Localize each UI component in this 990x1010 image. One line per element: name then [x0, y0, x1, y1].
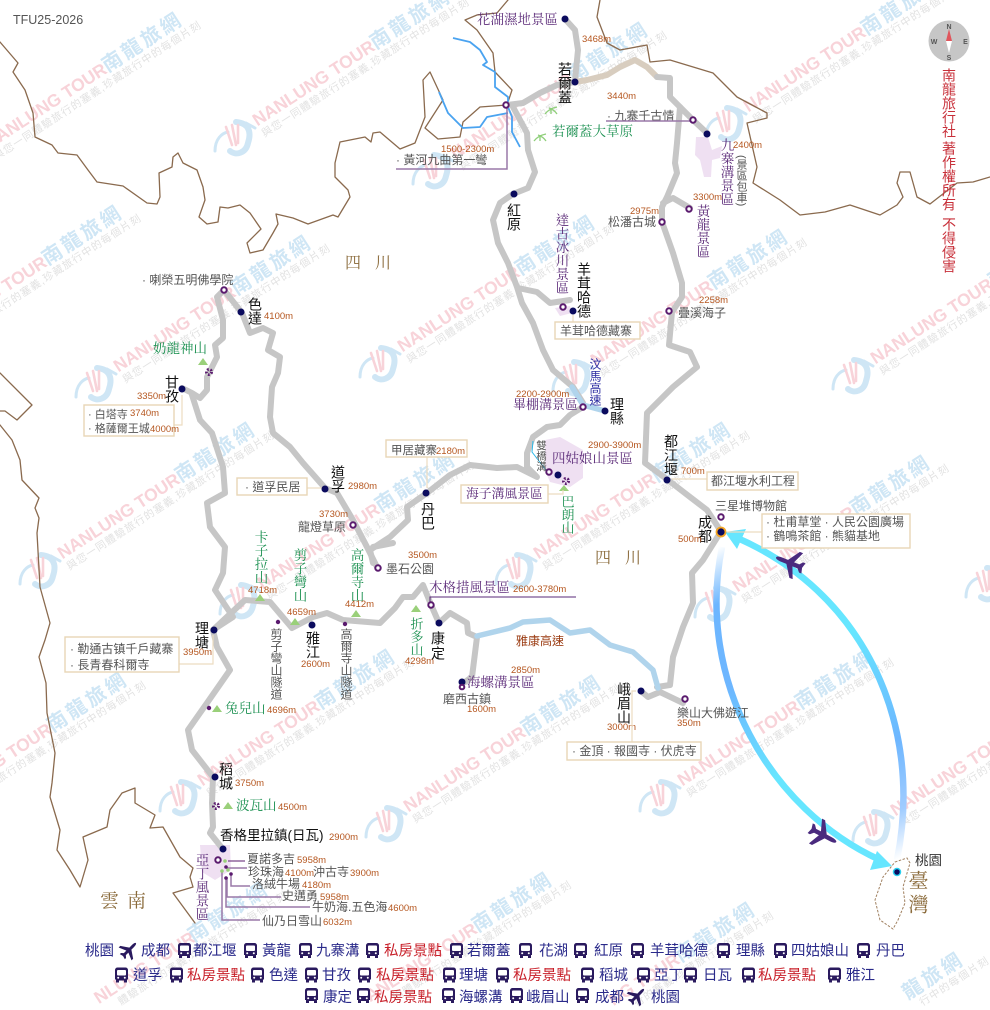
Nailong mountain: 奶龍神山: [153, 340, 207, 356]
watermark layer: 南龍旅網: [184, 877, 274, 947]
Gaoersi mountain: [345, 547, 374, 617]
watermark layer: 南龍旅網: [311, 644, 401, 714]
Balang mountain: 巴朗山: [560, 495, 574, 534]
stop: Seda: 4100m: [264, 311, 293, 322]
itinerary line 2: 私房景點: [376, 967, 434, 984]
stop: Diexi lake: 疊溪海子: [678, 305, 726, 320]
Zheduo mountain: 折多山: [408, 616, 424, 656]
stop: Jiuzhaigou: 2400m: [733, 140, 762, 151]
watermark layer: 龍旅網: [898, 947, 969, 1004]
stop: Ganzi: · 格薩爾王城: [88, 421, 150, 435]
watermark layer: NANLUNG TOUR: [394, 262, 524, 356]
stop: Mugecuo: 木格措風景區: [429, 579, 510, 595]
Yading scenic area: 4100m: [285, 868, 314, 879]
copyright notice: [941, 68, 957, 273]
stop: Hongyuan: 紅原: [506, 203, 522, 231]
stop: Longdeng grassland: 3730m: [319, 509, 348, 520]
stop: Hongyuan: [506, 190, 522, 231]
stop: Siguniang mountain: 四姑娘山景區: [552, 451, 633, 466]
stop: Siguniang mountain: [532, 439, 641, 478]
watermark layer: 南龍旅網: [647, 417, 737, 487]
stop: Litang: 3950m: [183, 647, 212, 658]
stop: Ganzi: 甘孜: [164, 375, 180, 403]
label: Wenma expressway: 汶馬高速: [588, 357, 602, 406]
compass: [928, 20, 970, 62]
stop: Ganzi: 4000m: [150, 424, 179, 435]
stop: Litang: · 勒通古镇千戶藏寨: [70, 641, 173, 656]
watermark layer: 行中的每個片刻: [917, 954, 990, 1009]
stop: Huahu wetland: 3468m: [582, 34, 611, 45]
stop: Shangri-La town: [220, 828, 358, 852]
itinerary line 1: 私房景點: [384, 942, 442, 960]
Yading scenic area: 牛奶海.五色海: [312, 899, 387, 914]
watermark layer: 同體驗旅行的塞義,珍藏旅行中的每個片刻: [390, 878, 574, 1004]
stop: Danba: 甲居藏寨: [391, 443, 437, 457]
watermark layer: ANLUNG TOUR: [362, 919, 481, 1006]
scenic area blobs: [200, 137, 722, 880]
watermark layer: NANLUNG TOUR: [729, 502, 859, 596]
stop: Bipenggou: 畢棚溝景區: [513, 397, 578, 412]
stop: Dujiangyan: 700m: [681, 466, 705, 477]
itinerary line 3: 桃園: [651, 989, 680, 1006]
watermark layer: 與您一同體驗旅行的塞義,珍藏旅行中的每個片刻: [410, 681, 623, 826]
Gaoersi mountain: 高爾寺山: [348, 547, 364, 602]
Jianziwan mountain: 剪子彎山: [292, 548, 307, 602]
stop: Dagu glacier: 達古冰川景區: [554, 212, 569, 294]
watermark layer: 南龍旅網: [371, 447, 461, 517]
stop: Huahu wetland: 花湖濕地景區: [477, 11, 558, 27]
stop: Huanglong: [686, 192, 722, 258]
watermark layer: 與您一同體驗旅行的塞義,珍藏旅行中的每個片刻: [404, 221, 617, 366]
stop: Emei mountain: 峨眉山: [616, 682, 632, 724]
stop: Songpan: [608, 206, 665, 229]
stop: Jiuzhaigou: [704, 130, 762, 206]
label: Yakang expressway: 雅康高速: [516, 633, 564, 648]
compass: S: [947, 55, 952, 62]
watermark layer: 南龍旅網: [564, 17, 654, 87]
stop: Emei mountain: [567, 682, 701, 760]
stop: Ganzi: 3740m: [130, 408, 159, 419]
itinerary line 3: 私房景點: [374, 989, 432, 1006]
Yading scenic area: 3900m: [350, 868, 379, 879]
itinerary line 2: 亞丁: [654, 968, 683, 984]
stop: Shangri-La town: 2900m: [329, 832, 358, 843]
itinerary line 1: [85, 937, 905, 963]
stop: Chengdu: · 杜甫草堂 · 人民公園廣場: [766, 514, 904, 529]
Yading scenic area: 沖古寺: [313, 864, 349, 879]
Haizigou box: [461, 485, 563, 503]
Yading scenic area: 4180m: [302, 880, 331, 891]
itinerary line 2: 私房景點: [758, 967, 816, 984]
stop: Huahu wetland: [477, 11, 611, 45]
stop: Yangrong Hade: [555, 262, 640, 339]
stop: Moshi park: [375, 550, 437, 576]
Yading scenic area: 6032m: [323, 917, 352, 928]
stop: Litang: [65, 621, 218, 672]
stop: Songpan: 松潘古城: [608, 214, 656, 229]
stop: Yajiang: 2600m: [301, 659, 330, 670]
stop: Seda: · 喇榮五明佛學院: [142, 272, 233, 287]
stop: Mugecuo: [428, 579, 576, 608]
Yading scenic area: 史邁勇: [282, 889, 318, 903]
watermark layer: NANLUNG TOUR: [249, 36, 379, 130]
stop: Dujiangyan: 都江堰: [663, 434, 679, 476]
stop: Seda: 色達: [247, 296, 263, 326]
stop: Daocheng: 稻城: [218, 762, 234, 791]
itinerary line 3: 海螺溝: [459, 989, 502, 1006]
stop: Dujiangyan: 都江堰水利工程: [711, 474, 795, 488]
watermark layer: 與您一同體驗旅行的塞義,珍藏旅行中的每個片刻: [739, 461, 952, 606]
stop: Lixian: [602, 397, 625, 425]
stop: Yajiang: 雅江: [305, 631, 321, 659]
stop: Diexi lake: 2258m: [699, 295, 728, 306]
stop: Songpan: 2975m: [630, 206, 659, 217]
watermark layer: NANLUNG TOUR: [54, 469, 184, 563]
itinerary line 1: 都江堰: [193, 942, 236, 960]
compass: E: [963, 39, 968, 46]
stop: Leshan buddha: 350m: [677, 718, 701, 729]
stop: Leshan buddha: [677, 696, 749, 729]
Balang mountain: [559, 478, 574, 534]
watermark layer: NANLUNG TOUR: [400, 722, 530, 816]
Bowa mountain: 波瓦山: [236, 798, 276, 813]
expressways: [477, 387, 658, 688]
itinerary line 1: 成都: [141, 942, 170, 960]
stop: Hailuogou: 磨西古鎮: [443, 691, 491, 706]
watermark layer: 南龍旅網: [846, 450, 936, 520]
watermark layer: NANLUNG TOUR: [587, 276, 717, 370]
copyright notice: 不得侵害: [941, 217, 957, 273]
stop: Shangri-La town: 香格里拉鎮(日瓦): [220, 828, 324, 843]
itinerary line 1: 桃園: [85, 942, 114, 960]
Jianziwan tunnel: 剪子彎山隧道: [269, 627, 283, 701]
watermark layer: 與您一同體驗旅行的塞義,珍藏旅行中的每個片刻: [259, 0, 472, 140]
watermark layer: 與您一同體驗旅行的塞義,珍藏旅行中的每個片刻: [684, 655, 897, 800]
stop: Danba: [386, 440, 467, 530]
stop: Chengdu: · 鶴鳴茶館 · 熊貓基地: [766, 528, 880, 543]
Yading scenic area: 亞丁風景區: [194, 853, 209, 921]
stop: Yellow River first bend: · 黃河九曲第一彎: [396, 152, 487, 167]
stop: Moshi park: 墨石公園: [386, 562, 434, 576]
stop: Bipenggou: 2200-2900m: [516, 389, 569, 400]
watermark layer: 與您一同體驗旅行的塞義,珍藏旅行中的每個片刻: [64, 428, 277, 573]
stop: Ruoergai: 若爾蓋: [557, 61, 573, 104]
stop: Hailuogou: 海螺溝景區: [467, 674, 534, 690]
icon: airplane return: [804, 816, 843, 854]
Yading scenic area: 4600m: [388, 903, 417, 914]
stop: Ganzi: · 白塔寺: [88, 407, 128, 421]
itinerary route text: [85, 937, 905, 1009]
stop: Taoyuan, Taiwan: 臺灣: [905, 870, 928, 918]
watermark layer: 與您一同體驗旅行的塞義,珍藏旅行中的每個片刻: [457, 28, 670, 173]
Bowa mountain: 4500m: [278, 802, 307, 813]
Yading scenic area: 5958m: [320, 892, 349, 903]
watermark layer: 南龍旅網: [171, 417, 261, 487]
Zheduo mountain: [405, 605, 434, 667]
itinerary line 2: 私房景點: [187, 967, 245, 984]
stop: Moshi park: 3500m: [408, 550, 437, 561]
region labels: 四川: [345, 254, 405, 272]
watermark layer: NANLUNG TOUR: [674, 696, 804, 790]
stop: Mugecuo: 2600-3780m: [513, 584, 566, 595]
watermark layer: NLUNG TOUR: [90, 927, 199, 1008]
Ruoergai grassland label: 若爾蓋大草原: [552, 123, 633, 139]
watermark layer: 與您一同體驗旅行的塞義,珍藏旅行中的每個片刻: [597, 235, 810, 380]
stop: Daofu: 道孚: [330, 465, 346, 493]
road network: [182, 19, 720, 848]
watermark layer: 行的塞義,珍藏旅行中的每個片刻: [631, 909, 776, 1009]
Nailong mountain: [153, 340, 212, 374]
copyright notice: 南龍旅行社: [941, 68, 957, 138]
region labels: 雲南: [100, 890, 154, 912]
itinerary line 1: 若爾蓋: [467, 942, 510, 960]
stop: Ganzi: [84, 375, 186, 436]
Bowa mountain: [214, 798, 307, 813]
watermark layer: NANLUNG TOUR: [447, 69, 577, 163]
itinerary line 2: 稻城: [599, 967, 628, 984]
watermark layer: NG TOUR: [605, 949, 683, 1010]
stop: Bipenggou: [513, 389, 586, 412]
itinerary line 2: [115, 967, 875, 984]
itinerary line 1: 九寨溝: [316, 942, 360, 960]
stop: Yajiang: [301, 622, 330, 670]
stop: Siguniang mountain: 雙橋溝: [535, 439, 547, 472]
itinerary line 2: 理塘: [459, 967, 488, 984]
stop: Longdeng grassland: 龍燈草原: [298, 519, 346, 534]
Yading scenic area: [194, 851, 417, 928]
watermark layer: 與您一同體驗旅行的塞義,珍藏旅行中的每個片刻: [540, 428, 753, 573]
stop: Hailuogou: 1600m: [467, 704, 496, 715]
stop: Litang: · 長青春科爾寺: [70, 658, 149, 672]
stop: Seda: [142, 272, 293, 326]
Gaoersi tunnel: 高爾寺山隧道: [339, 627, 353, 701]
Yading scenic area: 5958m: [297, 855, 326, 866]
stop: Daofu: 2980m: [348, 481, 377, 492]
stop: Yangrong Hade: 羊茸哈德藏寨: [560, 323, 632, 338]
itinerary line 2: 色達: [269, 967, 298, 984]
itinerary line 1: 黃龍: [262, 942, 291, 960]
stop: Yellow River first bend: 1500-2300m: [441, 144, 494, 155]
itinerary line 2: 雅江: [846, 967, 875, 984]
watermark layer: 體驗旅行的塞義,珍藏旅行中的每個片刻: [116, 888, 290, 1008]
stop: Chengdu: 500m: [678, 534, 702, 545]
stop: Daofu: [237, 465, 377, 495]
code label: TFU25-2026: [13, 13, 83, 27]
itinerary line 2: 私房景點: [513, 967, 571, 984]
watermark layer: 南龍旅網: [704, 224, 794, 294]
flight arc: Chengdu to Taoyuan: [716, 547, 892, 870]
itinerary line 3: 康定: [323, 989, 352, 1006]
stop: Emei mountain: 3000m: [607, 722, 636, 733]
stop: Siguniang mountain: 2900-3900m: [588, 440, 641, 451]
watermark layer: 南龍旅網: [671, 897, 761, 967]
stop: Danba: 2180m: [436, 446, 465, 457]
stop: Hailuogou: 2850m: [511, 665, 540, 676]
watermark layer: 與您一同體驗旅行的塞義,珍藏旅行中的每個片刻: [120, 241, 333, 386]
stop: Emei mountain: · 金頂 · 報國寺 · 伏虎寺: [572, 743, 697, 758]
watermark layer: NANLUNG TOUR: [254, 499, 384, 593]
rivers: Yellow River headwaters: [439, 38, 520, 147]
stop: Chengdu: 成都: [697, 515, 713, 543]
watermark layer: 南龍旅網: [468, 867, 558, 937]
stop: Jiuzhaigou: 九寨溝景區: [718, 138, 734, 206]
stop: Longdeng grassland: [298, 509, 356, 534]
itinerary line 1: 羊茸哈德: [650, 942, 708, 960]
Haizigou box: 海子溝風景區: [466, 486, 543, 501]
stop: Litang: 理塘: [194, 621, 210, 649]
stop: Ruoergai: [557, 61, 636, 104]
stop: Daocheng: [212, 762, 264, 791]
Kazila mountain: 4718m: [248, 585, 277, 596]
Yading scenic area: 洛絨牛場: [252, 876, 300, 891]
compass: N: [946, 24, 952, 31]
stop: Huanglong: 3300m: [693, 192, 722, 203]
watermark layer: 南龍旅網: [227, 230, 317, 300]
stop: Yellow River first bend: [396, 102, 509, 169]
stop: Taoyuan, Taiwan: 桃園: [915, 853, 942, 868]
Zheduo mountain: 4298m: [405, 656, 434, 667]
itinerary line 3: 成都: [595, 989, 624, 1006]
itinerary line 1: 花湖: [539, 942, 568, 960]
stop: Daofu: · 道孚民居: [245, 480, 300, 494]
stop: Leshan buddha: 樂山大佛遊江: [677, 705, 749, 720]
watermark layer: 南龍旅網: [791, 644, 881, 714]
stop: Dujiangyan: [663, 434, 798, 490]
watermark layer: 南龍旅網: [98, 7, 188, 77]
stop: Daocheng: 3750m: [235, 778, 264, 789]
flight arc: Taoyuan to Chengdu: [725, 529, 903, 860]
itinerary line 3: [305, 983, 680, 1009]
watermark layer: NANLUNG TOUR: [194, 696, 324, 790]
stop: Jiuzhai show: · 九寨千古情: [607, 108, 674, 123]
itinerary line 1: 理縣: [736, 942, 765, 960]
Yading scenic area: 珍珠海: [248, 864, 284, 879]
itinerary line 1: 四姑娘山: [791, 942, 849, 960]
Gaoersi mountain: 4412m: [345, 599, 374, 610]
Kazila mountain: 卡子拉山: [252, 529, 268, 584]
stop: Taoyuan, Taiwan: [875, 853, 942, 929]
Tuer mountain: 4696m: [267, 705, 296, 716]
Kazila mountain: [248, 529, 277, 601]
stop: Ruoergai: 3440m: [607, 91, 636, 102]
watermark layer: 南龍旅網: [43, 667, 133, 737]
Tuer mountain: 兔兒山: [225, 701, 266, 716]
watermark layer: 與您一同體驗旅行的塞義,珍藏旅行中的每個片刻: [204, 655, 417, 800]
itinerary line 1: 丹巴: [876, 944, 905, 960]
Tuer mountain: [207, 701, 296, 716]
watermark layer: 南龍旅網: [511, 210, 601, 280]
Jianziwan mountain: [287, 548, 316, 625]
stop: Kangding: 康定: [430, 630, 446, 661]
stop: Chengdu: [678, 498, 910, 548]
stop: Hailuogou: [443, 665, 540, 715]
watermark layer: 南龍旅網: [517, 670, 607, 740]
region labels: 四川: [595, 549, 655, 567]
itinerary line 3: 峨眉山: [526, 989, 570, 1006]
stop: Diexi lake: [666, 295, 728, 320]
icon: airplane outbound: [771, 544, 809, 581]
Yading scenic area: 仙乃日雪山: [262, 914, 322, 928]
watermark layer: NANLUNG TOUR: [740, 22, 870, 116]
icon: grassland: [534, 107, 557, 141]
watermark layer: NANLUNG TOUR: [530, 469, 660, 563]
itinerary line 2: 甘孜: [322, 967, 351, 984]
compass: W: [931, 39, 938, 46]
watermark layer: NANLUNG TOUR: [110, 282, 240, 376]
Yading scenic area: 夏諾多吉: [247, 851, 295, 866]
region labels: [100, 254, 655, 912]
stop: Chengdu: 三星堆博物館: [715, 498, 787, 513]
itinerary line 2: 道孚: [133, 967, 162, 984]
stop: Huanglong: 黃龍景區: [694, 203, 710, 258]
itinerary line 2: 日瓦: [703, 968, 732, 984]
itinerary line 1: 紅原: [594, 942, 623, 960]
stop: Lixian: 理縣: [609, 397, 625, 425]
copyright notice: 著作權所有: [941, 141, 957, 212]
stop: Yangrong Hade: 羊茸哈德: [576, 262, 592, 318]
stop: Danba: 丹巴: [420, 502, 436, 530]
Jianziwan mountain: 4659m: [287, 607, 316, 618]
stop: Jiuzhaigou: (景區包車): [735, 155, 748, 206]
stop: Ganzi: 3350m: [137, 391, 166, 402]
watermark layer: 南龍旅網: [38, 200, 128, 270]
watermark layer: 與您一同體驗旅行的塞義,珍藏旅行中的每個片刻: [264, 458, 477, 603]
